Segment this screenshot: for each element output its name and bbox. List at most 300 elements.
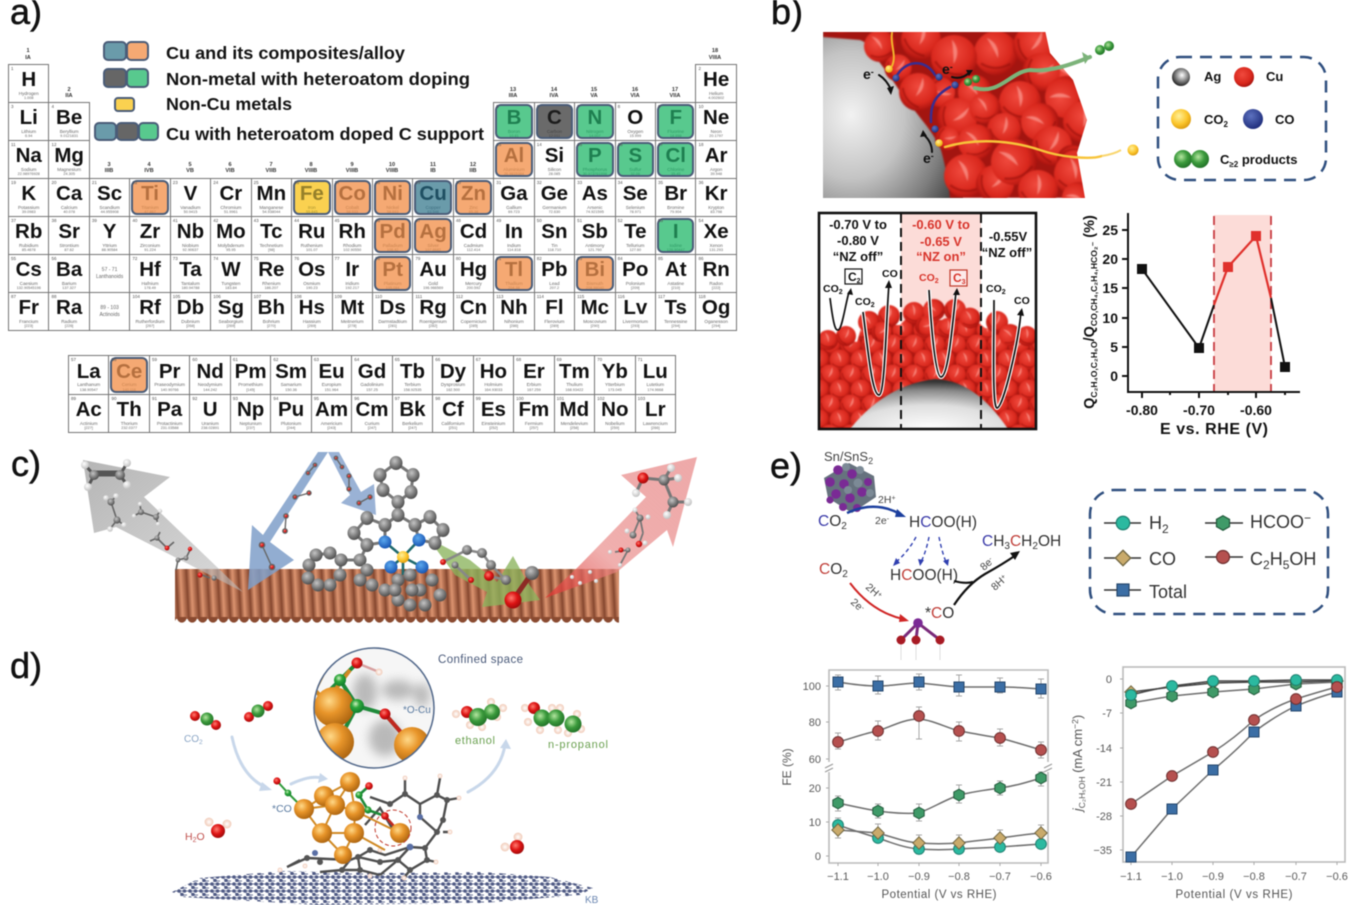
periodic table main grid: 91.224 [144, 248, 156, 252]
group number headers: 8 [309, 162, 313, 168]
periodic table main grid: [293] [631, 324, 640, 328]
periodic table main grid: 34 [618, 180, 623, 184]
periodic table main grid: 72.630 [549, 210, 560, 214]
lanthanide and actinide rows: 57 [71, 357, 76, 362]
pathway: blue route to formate: 2 [841, 521, 847, 532]
legend: product series [1090, 490, 1328, 614]
lanthanide and actinide rows: Neptunium [240, 420, 262, 426]
illustration: Ag sphere with Cu particles and reaction path: - [950, 62, 953, 72]
lanthanide and actinide rows: Sm [275, 360, 307, 382]
periodic table main grid: Fl [545, 296, 564, 319]
lanthanide and actinide rows: 168.93422 [565, 388, 583, 392]
pathway: red route to CO: 2H [863, 581, 881, 599]
periodic table main grid: 54.938044 [262, 210, 280, 214]
legend: product series: OH [1289, 549, 1316, 569]
periodic table main grid: K [21, 182, 36, 205]
chart: ethanol partial current density vs potential [1070, 667, 1348, 901]
periodic table main grid: Palladium [383, 242, 403, 248]
lanthanide and actinide rows: 91 [152, 396, 157, 400]
periodic table main grid: 74 [213, 256, 218, 260]
periodic table main grid: 28 [375, 180, 380, 184]
periodic table main grid: [209] [631, 286, 640, 290]
line chart: Q ratio vs potential: (%) [1082, 215, 1098, 242]
schematic: NZ on and off potential regions: CO [986, 283, 1002, 295]
periodic table main grid: Cu [419, 182, 447, 205]
illustration: Ag sphere with Cu particles and reaction path: - [871, 67, 874, 77]
lanthanide and actinide rows: 61 [233, 357, 238, 362]
pathway: blue route to formate: CO [818, 513, 841, 530]
periodic table main grid: 23 [173, 180, 178, 184]
periodic table main grid: 85 [658, 256, 663, 260]
chart: ethanol partial current density vs potential: Potential (V vs RHE) [1176, 889, 1293, 901]
periodic table main grid: 180.94788 [181, 286, 199, 290]
legend: product series: − [1304, 511, 1311, 525]
periodic table main grid: Hg [460, 258, 487, 281]
periodic table main grid: Pb [541, 258, 568, 281]
chart: ethanol partial current density vs potential: −0.8 [1243, 871, 1265, 883]
periodic table main grid: Te [624, 220, 646, 243]
periodic table main grid: Sr [58, 220, 80, 243]
lanthanide and actinide rows: Actinium [80, 420, 98, 426]
schematic: NZ on and off potential regions: CO [855, 296, 871, 308]
periodic table main grid: Rh [339, 220, 366, 243]
schematic: NZ on and off potential regions: CO [882, 268, 898, 280]
periodic table main grid: Rubidium [19, 242, 38, 248]
periodic table main grid: 196.966569 [423, 286, 443, 290]
periodic table main grid: Nitrogen [586, 128, 604, 134]
schematic: NZ on and off potential regions: -0.70 V to [829, 217, 887, 232]
periodic table main grid: 69.723 [508, 210, 520, 214]
lanthanide and actinide rows: [247] [408, 426, 417, 430]
periodic table main grid: 92.90637 [183, 248, 198, 252]
periodic table main grid: W [221, 258, 241, 281]
lanthanide and actinide rows: Er [523, 360, 545, 382]
periodic table main grid: Molybdenum [218, 242, 244, 248]
legend: catalyst categories [93, 40, 484, 144]
periodic table main grid: Br [664, 182, 687, 205]
periodic table main grid: 36 [698, 180, 703, 184]
periodic table main grid: P [588, 144, 602, 167]
lanthanide and actinide rows: 93 [233, 396, 238, 400]
chart: Faradaic efficiency vs potential: 100 [803, 681, 821, 693]
periodic table main grid: 32.06 [631, 172, 640, 176]
periodic table main grid: Ca [56, 182, 82, 205]
periodic table main grid: Seaborgium [219, 318, 243, 324]
pathway: ethanol product: H [1021, 533, 1032, 550]
molecules in gray arrow [81, 459, 217, 581]
periodic table main grid: 58.933 [346, 210, 358, 214]
periodic table main grid: 14 [537, 142, 542, 146]
periodic table main grid: S [628, 144, 642, 167]
chart: Faradaic efficiency vs potential: 10 [809, 817, 821, 829]
periodic table main grid: 80 [456, 256, 461, 260]
periodic table main grid: 57 - 71 [102, 266, 117, 272]
periodic table main grid: Sb [582, 220, 608, 243]
periodic table main grid: Ba [56, 258, 82, 281]
lanthanide and actinide rows [67, 354, 677, 434]
panel a: periodic table of catalyst elements [7, 0, 738, 434]
periodic table main grid: 15 [577, 142, 582, 146]
periodic table main grid: 195.084 [386, 286, 400, 290]
line chart: Q ratio vs potential: 5 [1110, 339, 1118, 355]
line chart: Q ratio vs potential: 15 [1102, 280, 1118, 296]
pathway: red route to CO: 2e [848, 596, 865, 613]
chart: Faradaic efficiency vs potential: 60 [809, 754, 821, 766]
periodic table main grid: 83.798 [710, 210, 722, 214]
lanthanide and actinide rows: Mendelevium [561, 420, 588, 426]
periodic table main grid: 86 [698, 256, 703, 260]
periodic table main grid: 20.1797 [709, 134, 723, 138]
periodic table main grid: 12.011 [549, 134, 560, 138]
periodic table main grid: Francium [19, 318, 38, 324]
Cu cluster with CO and O-Cu sites [272, 772, 411, 864]
arrow: red alcohol products [545, 457, 697, 598]
periodic table main grid: 84 [618, 256, 623, 260]
lanthanide and actinide rows: Berkelium [402, 420, 423, 426]
lanthanide and actinide rows: 174.9668 [647, 388, 663, 392]
lanthanide and actinide rows: Plutonium [281, 420, 301, 426]
periodic table main grid: 115 [577, 294, 584, 298]
periodic table main grid: O [627, 106, 643, 129]
periodic table main grid: Lead [549, 280, 560, 286]
periodic table main grid: 73 [173, 256, 178, 260]
periodic table main grid: Cobalt [346, 204, 359, 210]
line chart: Q ratio vs potential: -0.60 [1240, 402, 1272, 418]
periodic table main grid: Og [702, 296, 730, 319]
periodic table main grid: 113 [496, 294, 503, 298]
periodic table main grid: Ds [380, 296, 406, 319]
pathway: ethanol product: C [1010, 533, 1021, 550]
lanthanide and actinide rows: U [203, 398, 218, 421]
lanthanide and actinide rows: [257] [530, 426, 538, 430]
lanthanide and actinide rows: Am [315, 398, 348, 421]
periodic table main grid: Hafnium [141, 280, 159, 286]
lanthanide and actinide rows: La [77, 360, 101, 382]
periodic table main grid: Polonium [626, 280, 645, 286]
periodic table main grid: 208.98040 [586, 286, 604, 290]
periodic table main grid: 75 [254, 256, 259, 260]
group number headers: VA [590, 93, 598, 99]
periodic table main grid: Fluorine [667, 128, 684, 134]
periodic table main grid: 38 [51, 218, 56, 222]
periodic table main grid: Hassium [303, 318, 321, 324]
periodic table main grid: Radium [61, 318, 77, 324]
lanthanide and actinide rows: Dy [440, 360, 466, 382]
lanthanide and actinide rows: 66 [435, 357, 440, 362]
chart: ethanol partial current density vs potential: −0.9 [1202, 871, 1224, 883]
group number headers: 11 [430, 162, 436, 168]
periodic table main grid: 106 [213, 294, 221, 298]
periodic table main grid: 11 [11, 142, 16, 146]
lanthanide and actinide rows: 63 [314, 357, 319, 362]
periodic table main grid: Re [258, 258, 284, 281]
group number headers: 5 [188, 162, 192, 168]
periodic table main grid: Os [298, 258, 325, 281]
schematic: NZ on and off potential regions: “NZ off” [833, 249, 883, 264]
periodic table main grid: Osmium [303, 280, 320, 286]
KB carbon support sheet [172, 871, 593, 905]
periodic table main grid: 12 [51, 142, 56, 146]
lanthanide and actinide rows: Ho [480, 360, 507, 382]
periodic table main grid: Tennessine [664, 318, 687, 324]
lanthanide and actinide rows: Einsteinium [482, 420, 505, 426]
periodic table main grid: 121.760 [588, 248, 602, 252]
periodic table main grid: 72 [132, 256, 137, 260]
periodic table main grid: 200.592 [467, 286, 480, 290]
water molecules [185, 818, 524, 854]
periodic table main grid: 3 [11, 104, 14, 108]
periodic table main grid: 116 [618, 294, 625, 298]
CO2 molecules [184, 701, 273, 746]
periodic table main grid: [290] [591, 324, 599, 328]
panel e label: e) [770, 445, 802, 486]
lanthanide and actinide rows: 65 [395, 357, 400, 362]
inset: confined space magnifier [314, 648, 434, 768]
pathway: red route to CO [819, 561, 954, 622]
lanthanide and actinide rows: 89 [71, 396, 76, 400]
chart: Faradaic efficiency vs potential: −0.9 [908, 871, 930, 883]
lanthanide and actinide rows: 71 [638, 357, 643, 362]
periodic table main grid: Silicon [548, 166, 561, 172]
line chart: Q ratio vs potential: 20 [1102, 251, 1118, 267]
group number headers: IIA [65, 93, 73, 99]
chart: ethanol partial current density vs potential: j [1070, 807, 1085, 813]
n-propanol product: n-propanol [548, 739, 608, 751]
lanthanide and actinide rows: Tb [400, 360, 425, 382]
periodic table main grid: 9 [658, 104, 661, 108]
periodic table main grid: [226] [65, 324, 73, 328]
lanthanide and actinide rows: [252] [489, 426, 498, 430]
periodic table main grid: 56 [51, 256, 56, 260]
periodic table main grid: 46 [375, 218, 380, 222]
legend: Ag Cu CO2 CO products: Ag [1204, 69, 1221, 84]
line chart: Q ratio vs potential: CO,CH₄,C₂H₄,HCO₂⁻ [1089, 241, 1099, 326]
periodic table main grid: Indium [507, 242, 521, 248]
periodic table main grid: 137.327 [62, 286, 76, 290]
lanthanide and actinide rows: Es [481, 398, 506, 421]
periodic table main grid: Caesium [20, 280, 38, 286]
periodic table main grid: Yttrium [102, 242, 117, 248]
lanthanide and actinide rows: 64 [354, 357, 359, 362]
ethanol product [452, 698, 507, 747]
schematic: NZ on and off potential regions: 2 [871, 302, 875, 309]
periodic table main grid: 117 [658, 294, 665, 298]
group number headers: 12 [470, 162, 476, 168]
legend: catalyst categories: Non-Cu metals [166, 94, 292, 114]
chart: ethanol partial current density vs potential: -14 [1096, 743, 1112, 755]
n-propanol product [521, 702, 608, 751]
periodic table main grid: Ra [56, 296, 82, 319]
periodic table main grid: [278] [348, 324, 356, 328]
periodic table main grid: Cl [665, 144, 686, 167]
periodic table main grid: Cs [16, 258, 42, 281]
group number headers: 13 [510, 87, 516, 93]
pathway: blue route to formate: - [887, 516, 890, 523]
lanthanide and actinide rows: Samarium [281, 382, 302, 387]
schematic: NZ on and off potential regions: -0.65 V [920, 234, 962, 249]
lanthanide and actinide rows: Ytterbium [605, 382, 625, 387]
line chart: Q ratio vs potential [1082, 213, 1300, 438]
periodic table main grid: Titanium [141, 204, 159, 210]
periodic table main grid: 106.42 [387, 248, 398, 252]
chart: Faradaic efficiency vs potential: −0.7 [989, 871, 1011, 883]
periodic table main grid: Zr [140, 220, 160, 243]
chart: ethanol partial current density vs potential: −35 [1093, 845, 1112, 857]
periodic table main grid: 22.98976928 [18, 172, 40, 176]
lanthanide and actinide rows: 173.045 [608, 388, 622, 392]
periodic table main grid: 50.9415 [184, 210, 197, 214]
schematic: NZ on and off potential regions: -0.80 V [837, 233, 879, 248]
lanthanide and actinide rows: 59 [152, 357, 157, 362]
lanthanide and actinide rows: Praseodymium [154, 382, 185, 387]
periodic table main grid: Ru [298, 220, 325, 243]
periodic table main grid: Ag [419, 220, 447, 243]
lanthanide and actinide rows: Dysprosium [441, 382, 465, 387]
periodic table main grid: 63.546 [427, 210, 439, 214]
periodic table main grid: C [547, 106, 562, 129]
periodic table main grid: 49 [496, 218, 501, 222]
lanthanide and actinide rows: Pm [235, 360, 267, 382]
periodic table main grid: 28.085 [549, 172, 560, 176]
periodic table main grid: Antimony [585, 242, 604, 248]
periodic table main grid: Db [177, 296, 204, 319]
group number headers: 6 [228, 162, 232, 168]
line chart: Q ratio vs potential: 25 [1102, 222, 1118, 238]
periodic table main grid: Tl [505, 258, 523, 281]
periodic table main grid: 112.414 [467, 248, 480, 252]
lanthanide and actinide rows: Cf [442, 398, 464, 421]
lanthanide and actinide rows: Curium [365, 420, 379, 426]
lanthanide and actinide rows: 101 [557, 396, 564, 400]
periodic table main grid: I [673, 220, 679, 243]
legend: catalyst categories: Cu and its composites/alloy [166, 43, 405, 63]
periodic table main grid: Zirconium [140, 242, 160, 248]
pathway: dashed transfer arrows [893, 537, 949, 566]
periodic table main grid: Sn [541, 220, 568, 243]
periodic table main grid: Flerovium [544, 318, 564, 324]
periodic table main grid: Xe [704, 220, 729, 243]
periodic table main grid: 88.90584 [102, 248, 118, 252]
periodic table main grid: Bismuth [587, 280, 603, 286]
periodic table main grid: [269] [308, 324, 316, 328]
periodic table main grid: Rg [419, 296, 447, 319]
water molecules: 2 [193, 837, 197, 844]
periodic table main grid: 19 [11, 180, 16, 184]
periodic table main grid: Manganese [259, 204, 283, 210]
periodic table main grid: Niobium [182, 242, 199, 248]
periodic table main grid: Iridium [345, 280, 359, 286]
periodic table main grid: 111 [415, 294, 422, 298]
group number headers: VIB [225, 168, 235, 174]
periodic table main grid: Actinoids [99, 312, 120, 318]
pathway: ethanol product: OH [1038, 533, 1061, 550]
periodic table main grid: Co [339, 182, 366, 205]
periodic table main grid: Rb [15, 220, 42, 243]
label: Sn/SnS2: 2 [868, 456, 873, 466]
periodic table main grid: 50 [537, 218, 542, 222]
periodic table main grid: Rf [139, 296, 161, 319]
pathway: blue route to formate: 2e [875, 515, 887, 527]
periodic table main grid: 1.008 [24, 96, 33, 100]
periodic table main grid: 74.921595 [586, 210, 604, 214]
legend: product series: HCOO [1250, 512, 1304, 532]
group number headers: VIA [630, 93, 640, 99]
periodic table main grid: Hs [299, 296, 325, 319]
periodic table main grid: 35 [658, 180, 663, 184]
chart: ethanol partial current density vs potential: -28 [1096, 811, 1112, 823]
periodic table main grid: Cr [220, 182, 242, 205]
pathway: red route to CO: *CO [925, 605, 954, 622]
illustration: Ag sphere with Cu particles and reaction path: - [931, 151, 934, 161]
periodic table main grid: Ir [345, 258, 359, 281]
periodic table main grid: 127.60 [629, 248, 641, 252]
periodic table main grid: Nihonium [504, 318, 524, 324]
pathway: black route to ethanol: 8e [978, 556, 995, 573]
periodic table main grid: Ne [703, 106, 729, 129]
periodic table main grid: 44.955908 [101, 210, 119, 214]
periodic table main grid: 41 [173, 218, 178, 222]
lanthanide and actinide rows: 150.36 [285, 388, 297, 392]
periodic table main grid: [281] [388, 324, 397, 328]
periodic table main grid: 87 [11, 294, 16, 298]
periodic table main grid: 1 [11, 66, 14, 70]
periodic table main grid: Al [504, 144, 524, 167]
periodic table main grid: 32 [537, 180, 542, 184]
schematic: NZ on and off potential regions: CO [919, 272, 935, 284]
periodic table main grid: [282] [429, 324, 437, 328]
periodic table main grid: 178.49 [144, 286, 156, 290]
lanthanide and actinide rows: Thorium [121, 420, 138, 426]
periodic table main grid: [268] [186, 324, 195, 328]
group number headers: VIIB [266, 168, 276, 174]
periodic table main grid: Gallium [506, 204, 522, 210]
chart: Faradaic efficiency vs potential: FE (%) [780, 748, 794, 786]
lanthanide and actinide rows: 97 [395, 396, 400, 400]
periodic table main grid: 47.867 [144, 210, 156, 214]
group number headers: VIIA [670, 93, 680, 99]
line chart: Q ratio vs potential: E vs. RHE (V) [1160, 421, 1268, 438]
lanthanide and actinide rows: 92 [192, 396, 197, 400]
periodic table main grid: Selenium [626, 204, 645, 210]
chart: Faradaic efficiency vs potential: 0 [815, 851, 821, 863]
periodic table main grid: 30.973761998 [583, 172, 607, 176]
periodic table main grid: Po [622, 258, 648, 281]
lanthanide and actinide rows: 238.02891 [201, 426, 219, 430]
periodic table main grid: 131.293 [709, 248, 723, 252]
periodic table main grid: Potassium [18, 204, 39, 210]
schematic: NZ on and off potential regions: -0.60 V to [912, 217, 970, 232]
periodic table main grid: 14.007 [589, 134, 601, 138]
legend: product series: 5 [1283, 558, 1290, 572]
periodic table main grid: Carbon [547, 128, 562, 134]
lanthanide and actinide rows: Np [237, 398, 264, 421]
schematic: NZ on and off potential regions: “NZ off” [982, 245, 1032, 260]
periodic table main grid: Mc [581, 296, 609, 319]
periodic table main grid: 81 [496, 256, 501, 260]
periodic table main grid: Hydrogen [19, 90, 39, 96]
lanthanide and actinide rows: Ac [76, 398, 102, 421]
icon: nanoparticle [824, 463, 876, 513]
lanthanide and actinide rows: Gd [358, 360, 386, 382]
lanthanide and actinide rows: 162.500 [446, 388, 460, 392]
chart: ethanol partial current density vs potential: ) [1070, 715, 1085, 719]
line chart: Q ratio vs potential: Q [1082, 398, 1098, 409]
periodic table main grid: [223] [24, 324, 33, 328]
lanthanide and actinide rows: Pa [157, 398, 182, 421]
line chart: Q ratio vs potential: -0.70 [1183, 402, 1215, 418]
chart: ethanol partial current density vs potential: −0.6 [1326, 871, 1348, 883]
periodic table main grid: 107.8682 [425, 248, 441, 252]
